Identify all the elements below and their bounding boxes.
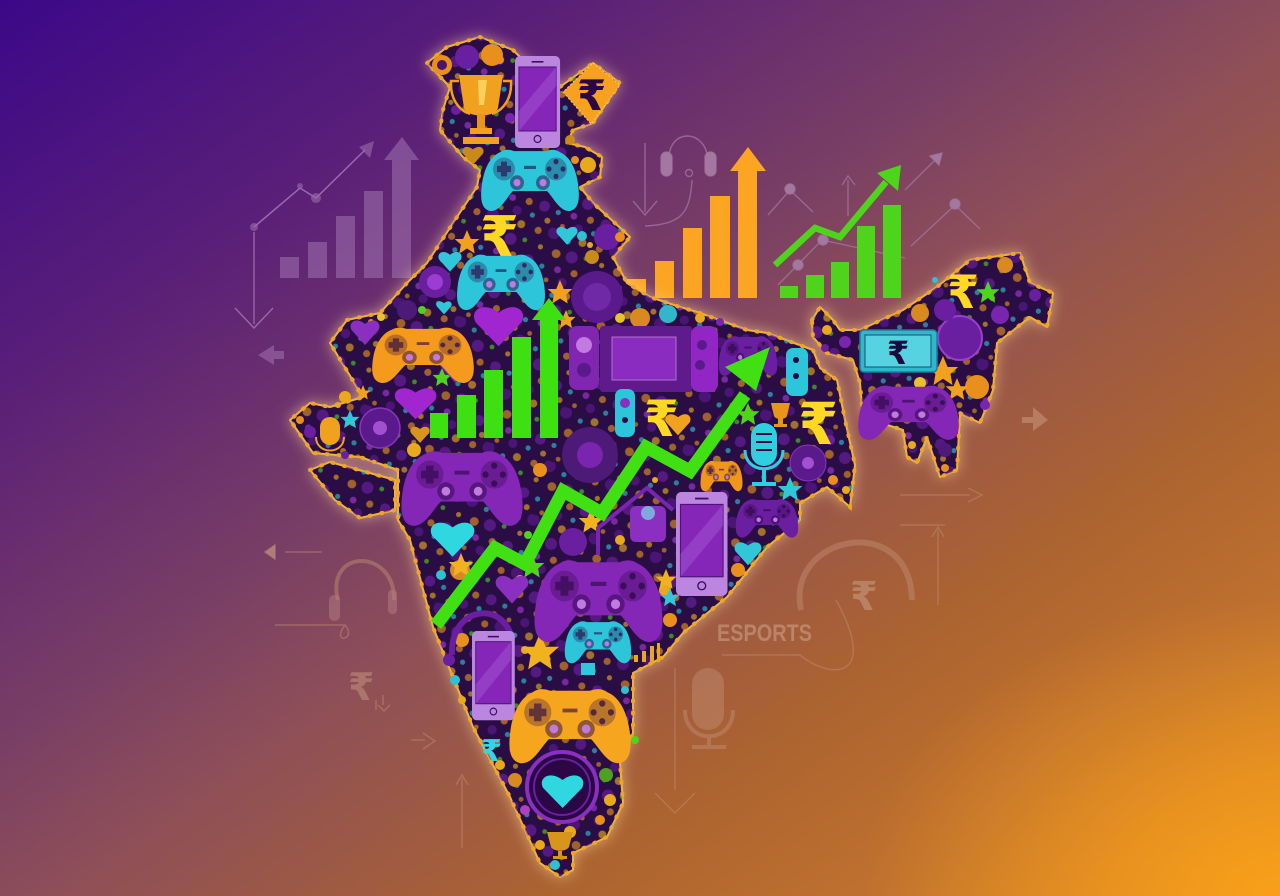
rupee cyan south: ₹ — [481, 735, 502, 768]
scattered small gaming icons — [296, 44, 1041, 870]
faint background icons right top — [633, 136, 980, 285]
icon: cyan joycon right — [786, 348, 808, 396]
icon: heart in ring — [527, 752, 597, 822]
orange bar chart with arrow — [627, 147, 766, 298]
faint background icons lower — [265, 407, 1048, 848]
ESPORTS label: ESPORTS — [717, 620, 812, 647]
rupee yellow center: ₹ — [644, 391, 679, 447]
map of northeast India — [812, 253, 1053, 477]
icon: cyan tablet with rupee — [860, 330, 937, 372]
icon: cyan joycon left — [615, 389, 635, 437]
icon: right phone — [676, 492, 728, 596]
icon: cyan microphone — [745, 423, 783, 486]
icon: cyan block — [581, 663, 595, 675]
icon: top phone — [515, 56, 560, 148]
icon: orange controller west — [372, 328, 474, 383]
icon: orange mic west — [316, 417, 344, 450]
icon: small cyan controller — [565, 621, 631, 663]
rupee yellow east: ₹ — [798, 392, 838, 457]
icon: large purple controller — [401, 451, 523, 526]
icon: rupee stamp: ₹ — [577, 72, 606, 119]
faint background chart left — [235, 137, 419, 365]
map edge speckles — [290, 37, 1053, 877]
rupee yellow upper: ₹ — [480, 205, 519, 268]
icon: cyan controller second — [457, 255, 545, 310]
big green growth arrow — [436, 347, 770, 625]
icon: signal bars — [634, 643, 660, 662]
icon: center purple controller — [534, 560, 663, 642]
icon: cyan heart — [431, 523, 474, 557]
icon: purple small controller — [736, 499, 798, 538]
icon: orange small controller — [700, 461, 743, 491]
icon: purple controller northeast of mainland — [719, 336, 777, 376]
icon: lower phone — [472, 631, 515, 720]
green bar chart with arrow — [775, 165, 901, 298]
icon: small trophy — [771, 403, 790, 427]
icon: purple hearts — [395, 307, 523, 419]
icon: small trophy south — [547, 832, 573, 859]
icon: northeast purple controller — [858, 386, 959, 440]
icon: cyan controller top — [481, 150, 579, 211]
rupee yellow northeast: ₹ — [947, 266, 979, 318]
map of India mainland — [290, 37, 855, 877]
icon: trophy — [451, 75, 511, 144]
map icon texture — [290, 37, 1053, 877]
icon: purple home badge — [598, 488, 673, 555]
icon: handheld console — [569, 326, 718, 392]
faint microphone capsule — [692, 668, 724, 730]
icon: orange large controller — [509, 689, 631, 763]
icon: headset arc — [452, 613, 512, 655]
faint rupee left: ₹ — [348, 667, 374, 709]
icon: cyan tablet with rupee: ₹ — [887, 335, 909, 371]
icon: rupee stamp — [563, 63, 620, 124]
green bar chart in map — [430, 298, 566, 438]
faint rupee right: ₹ — [850, 575, 878, 619]
